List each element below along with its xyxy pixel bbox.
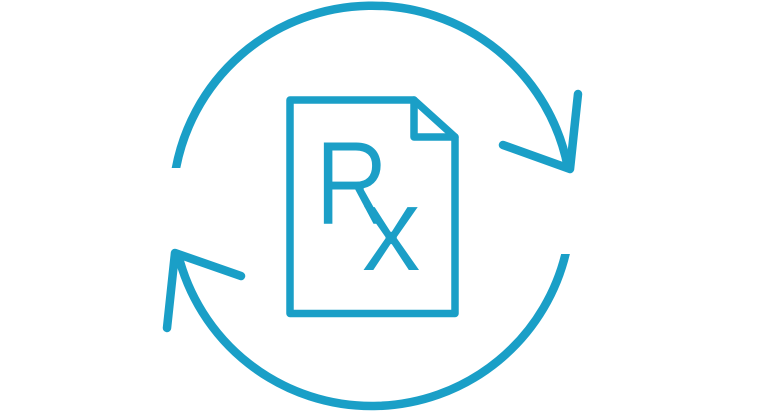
arrow: top clockwise arc xyxy=(175,6,578,175)
icon: prescription refill xyxy=(162,2,582,410)
arrow: bottom clockwise arc xyxy=(167,247,567,406)
text: Rx symbol xyxy=(315,115,422,296)
icon: prescription document xyxy=(290,100,455,314)
text: Rx symbol: R xyxy=(315,115,389,250)
text: Rx symbol: x xyxy=(361,160,422,296)
